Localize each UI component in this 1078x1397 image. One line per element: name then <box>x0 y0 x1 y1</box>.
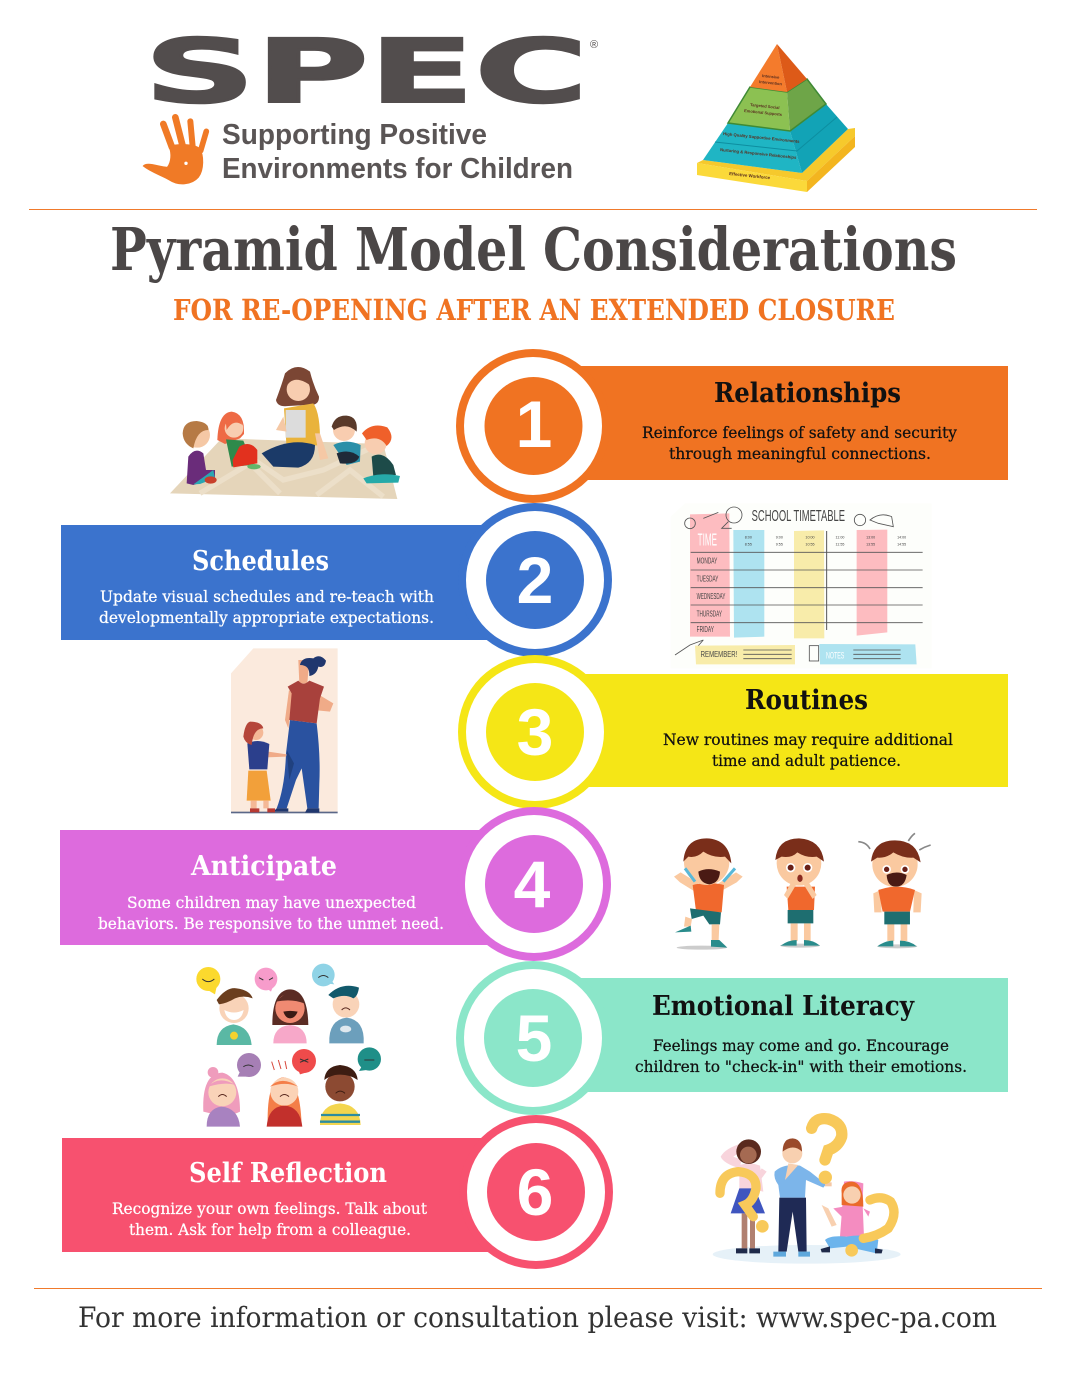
panel 3: Routines: Routines <box>745 684 868 716</box>
panel 2: Schedules: Update visual schedules and re-teach with <box>100 588 434 606</box>
illustration: school timetable: 14:55 <box>897 543 906 547</box>
crying boy <box>677 946 727 950</box>
panel 1: Relationships <box>456 349 1008 503</box>
illustration: school timetable: NOTES <box>826 650 844 660</box>
panel 4: Anticipate: Some children may have unexpected <box>127 894 416 912</box>
girl with pink hair <box>208 1067 218 1078</box>
panel 6: Self Reflection: Self Reflection <box>189 1157 387 1189</box>
panel 6: Self Reflection <box>62 1115 613 1269</box>
panel 5: Emotional Literacy <box>456 961 1008 1115</box>
panel 6: Self Reflection: them. Ask for help from a colleague. <box>129 1221 411 1239</box>
illustration: mother and child <box>231 648 338 813</box>
angry boy <box>877 944 917 948</box>
illustration: school timetable: 14:00 <box>897 535 906 539</box>
panel 5: Emotional Literacy: 5 <box>516 1001 552 1075</box>
icon: pyramid model: Effective Workforce <box>729 171 771 180</box>
illustration: school timetable: 10:55 <box>805 543 815 547</box>
illustration: six children with feelings bubbles <box>196 964 381 1127</box>
boy with curly hair <box>320 1103 361 1125</box>
footer: For more information or consultation please visit: www.spec-pa.com <box>78 1301 997 1334</box>
panel 5: Emotional Literacy: Feelings may come and go. Encourage <box>653 1037 949 1055</box>
teacher <box>276 367 319 406</box>
illustration: school timetable: WEDNESDAY <box>697 592 726 601</box>
illustration: school timetable: 8:55 <box>745 543 752 547</box>
panel 3: Routines: 3 <box>517 695 553 769</box>
panel 4: Anticipate: Anticipate <box>190 850 337 882</box>
mother <box>277 720 320 808</box>
logo: SPEC <box>144 20 598 123</box>
panel 4: Anticipate: behaviors. Be responsive to the unmet need. <box>98 915 444 933</box>
illustration: school timetable: MONDAY <box>697 557 718 566</box>
panel 2: Schedules: developmentally appropriate expectations. <box>99 609 434 627</box>
logo tagline: Supporting Positive <box>222 119 487 151</box>
panel 1: Relationships: 1 <box>516 387 552 461</box>
logo tagline <box>222 119 573 185</box>
kid 1 <box>187 451 215 485</box>
happy boy <box>217 1024 252 1045</box>
illustration: school timetable: 10:00 <box>805 535 815 539</box>
woman <box>742 1213 755 1248</box>
illustration: teacher with children on rug <box>170 367 400 499</box>
icon: pyramid model: High Quality Supportive Environments <box>723 131 800 144</box>
surprised boy <box>780 944 820 948</box>
kid 3 <box>333 442 361 465</box>
illustration: school timetable <box>671 503 932 668</box>
panel 4: Anticipate: 4 <box>514 847 551 921</box>
illustration: school timetable: 13:55 <box>866 543 875 547</box>
panel 3: Routines: time and adult patience. <box>712 752 901 770</box>
panel 2: Schedules: Schedules <box>192 545 329 577</box>
man <box>778 1198 807 1252</box>
logo tagline: Environments for Children <box>222 153 573 185</box>
illustration: school timetable: 11:55 <box>836 543 844 547</box>
kid 4 <box>372 455 396 477</box>
icon: pyramid model: Nurturing & Responsive Relationships <box>720 147 797 160</box>
illustration: school timetable: 9:00 <box>776 535 783 539</box>
illustration: school timetable: 8:00 <box>745 535 752 539</box>
panel 6: Self Reflection: 6 <box>517 1155 553 1229</box>
icon: pyramid model <box>697 44 855 192</box>
panel 2: Schedules: 2 <box>517 543 553 617</box>
illustration: school timetable: THURSDAY <box>697 609 722 618</box>
illustration: school timetable: 13:00 <box>866 535 875 539</box>
illustration: school timetable: FRIDAY <box>697 625 714 634</box>
seated woman <box>840 1181 864 1237</box>
icon: pyramid model: Targeted Social <box>750 102 780 110</box>
panel 2: Schedules <box>61 503 612 657</box>
illustration: people with question marks <box>713 1119 901 1264</box>
panel 1: Relationships: through meaningful connections. <box>669 445 931 463</box>
logo: SPEC: SPEC <box>144 20 588 123</box>
logo: SPEC: ® <box>590 39 598 51</box>
girl with hearts <box>272 989 308 1025</box>
icon: pyramid model: Emotional Supports <box>744 108 783 117</box>
panel 4: Anticipate <box>60 807 611 961</box>
panel 3: Routines: New routines may require additional <box>663 731 953 749</box>
subtitle: FOR RE-OPENING AFTER AN EXTENDED CLOSURE <box>173 293 895 327</box>
illustration: school timetable: 11:00 <box>836 535 844 539</box>
girl with orange hair <box>268 1077 302 1125</box>
panel 1: Relationships: Reinforce feelings of safety and security <box>642 424 957 442</box>
illustration: three boys with big feelings <box>674 833 931 950</box>
illustration: school timetable: TUESDAY <box>697 574 719 583</box>
panel 5: Emotional Literacy: Emotional Literacy <box>652 990 915 1022</box>
kid 2 <box>217 412 244 444</box>
panel 5: Emotional Literacy: children to "check-in" with their emotions. <box>635 1058 967 1076</box>
child <box>267 752 287 757</box>
illustration: school timetable: TIME <box>698 530 717 550</box>
panel 3: Routines <box>458 655 1008 809</box>
panel 6: Self Reflection: Recognize your own feelings. Talk about <box>112 1200 428 1218</box>
illustration: school timetable: REMEMBER! <box>701 650 737 659</box>
logo: orange handprint <box>143 117 206 184</box>
icon: pyramid model: Intervention <box>759 79 783 86</box>
illustration: school timetable: 9:55 <box>776 543 783 547</box>
sad boy <box>329 1018 364 1043</box>
icon: pyramid model: Intensive <box>762 73 780 80</box>
panel 1: Relationships: Relationships <box>714 377 901 409</box>
illustration: school timetable: SCHOOL TIMETABLE <box>752 508 845 525</box>
